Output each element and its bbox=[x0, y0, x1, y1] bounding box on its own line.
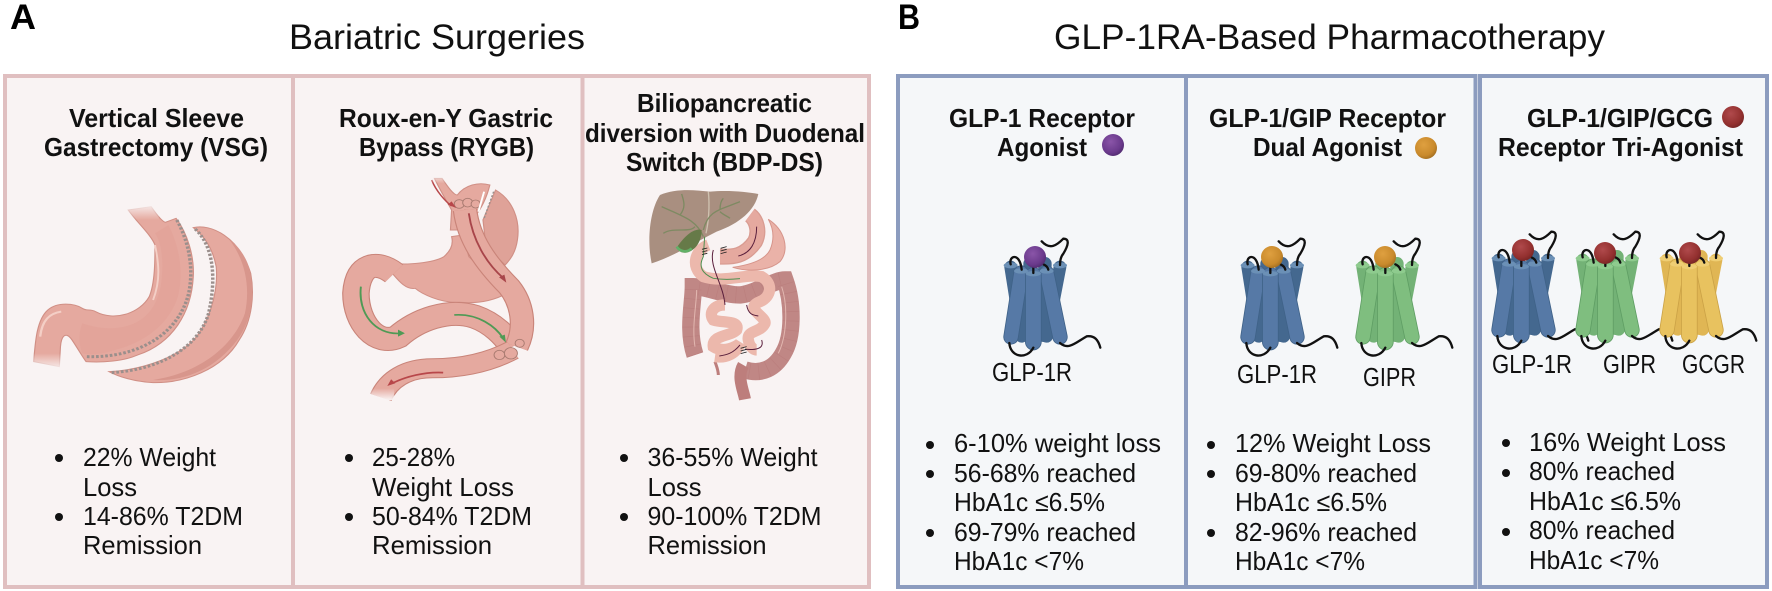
bullet list: dual agonist outcomes: HbA1c <7% bbox=[1235, 546, 1365, 576]
bullet list: VSG outcomes: 22% Weight bbox=[83, 442, 217, 472]
bullet list: BDP-DS outcomes: Loss bbox=[648, 472, 702, 502]
icon: GCGR receptor with red agonist: GCGR bbox=[1682, 349, 1745, 379]
bullet list: RYGB outcomes: Remission bbox=[372, 530, 492, 560]
bullet list: dual agonist outcomes: 69-80% reached bbox=[1235, 458, 1417, 488]
panel heading: BDP-DS: diversion with Duodenal bbox=[585, 118, 865, 148]
icon: GLP-1R receptor with red agonist bbox=[1492, 232, 1588, 379]
panel heading: tri-agonist: GLP-1/GIP/GCG bbox=[1527, 103, 1713, 133]
panel: biliopancreatic diversion with duodenal switch bbox=[582, 76, 869, 587]
icon: GLP-1R receptor with purple agonist bbox=[992, 239, 1100, 387]
icon: GIPR receptor with red agonist: GIPR bbox=[1603, 349, 1656, 379]
bullet list: RYGB outcomes: Weight Loss bbox=[372, 472, 514, 502]
icon: sleeve gastrectomy stomach bbox=[29, 203, 252, 383]
bullet list: dual agonist outcomes: 12% Weight Loss bbox=[1235, 428, 1431, 458]
panel heading: BDP-DS bbox=[585, 88, 865, 177]
panel heading: RYGB bbox=[339, 103, 553, 162]
panel heading: dual agonist: GLP-1/GIP Receptor bbox=[1209, 103, 1446, 133]
panel heading: GLP-1 receptor agonist: GLP-1 Receptor bbox=[949, 103, 1135, 133]
heading: Bariatric Surgeries: Bariatric Surgeries bbox=[289, 18, 585, 57]
bullet list: RYGB outcomes bbox=[345, 442, 532, 560]
panel: GLP-1 receptor agonist bbox=[898, 76, 1186, 587]
icon: GIPR receptor with red agonist bbox=[1576, 232, 1672, 379]
bullet list: VSG outcomes: 14-86% T2DM bbox=[83, 501, 243, 531]
bullet list: VSG outcomes: Loss bbox=[83, 472, 137, 502]
bullet list: GLP-1 agonist outcomes: 69-79% reached bbox=[954, 517, 1136, 547]
bullet list: BDP-DS outcomes: 36-55% Weight bbox=[648, 442, 818, 472]
panel heading: VSG: Gastrectomy (VSG) bbox=[44, 132, 268, 162]
panel heading: GLP-1 receptor agonist bbox=[949, 103, 1135, 162]
icon: GLP-1R receptor with orange agonist bbox=[1237, 239, 1337, 389]
icon: gastric bypass anatomy bbox=[356, 173, 524, 400]
bullet list: GLP-1 agonist outcomes: HbA1c <7% bbox=[954, 546, 1084, 576]
bullet list: tri-agonist outcomes: 16% Weight Loss bbox=[1529, 427, 1726, 457]
panel heading: BDP-DS: Switch (BDP-DS) bbox=[626, 147, 823, 177]
panel heading: dual agonist bbox=[1209, 103, 1446, 162]
panel heading: GLP-1 receptor agonist: Agonist bbox=[997, 132, 1087, 162]
icon: GCGR receptor with red agonist bbox=[1660, 232, 1756, 379]
panel heading: RYGB: Roux-en-Y Gastric bbox=[339, 103, 553, 133]
bullet list: GLP-1 agonist outcomes: 56-68% reached bbox=[954, 458, 1136, 488]
bullet list: BDP-DS outcomes: Remission bbox=[648, 530, 766, 560]
icon: GLP-1R receptor with purple agonist: GLP-1R bbox=[992, 357, 1072, 387]
icon: GIPR receptor with orange agonist bbox=[1356, 239, 1452, 392]
bullet list: tri-agonist outcomes: HbA1c <7% bbox=[1529, 545, 1659, 575]
panel: GLP-1/GIP/GCG receptor tri-agonist bbox=[1480, 76, 1767, 587]
panel: vertical sleeve gastrectomy bbox=[5, 76, 293, 587]
icon: GIPR receptor with orange agonist: GIPR bbox=[1363, 362, 1416, 392]
panel: GLP-1/GIP receptor dual agonist bbox=[1186, 76, 1476, 587]
bullet list: GLP-1 agonist outcomes: 6-10% weight loss bbox=[954, 428, 1161, 458]
panel heading: dual agonist: Dual Agonist bbox=[1253, 132, 1402, 162]
icon: GLP-1R receptor with red agonist: GLP-1R bbox=[1492, 349, 1572, 379]
panel heading: tri-agonist bbox=[1498, 103, 1744, 162]
bullet list: GLP-1 agonist outcomes: HbA1c ≤6.5% bbox=[954, 487, 1105, 517]
icon: GLP-1R receptor with orange agonist: GLP-1R bbox=[1237, 359, 1317, 389]
panel heading: RYGB: Bypass (RYGB) bbox=[359, 132, 534, 162]
bullet list: VSG outcomes bbox=[55, 442, 243, 560]
bullet list: tri-agonist outcomes bbox=[1502, 427, 1726, 575]
bullet list: VSG outcomes: Remission bbox=[83, 530, 202, 560]
bullet list: dual agonist outcomes bbox=[1207, 428, 1431, 576]
bullet list: tri-agonist outcomes: 80% reached bbox=[1529, 515, 1675, 545]
panel: Roux-en-Y gastric bypass bbox=[293, 76, 582, 587]
bullet list: tri-agonist outcomes: HbA1c ≤6.5% bbox=[1529, 486, 1681, 516]
bullet list: RYGB outcomes: 50-84% T2DM bbox=[372, 501, 532, 531]
panel heading: tri-agonist: Receptor Tri-Agonist bbox=[1498, 132, 1743, 162]
panel heading: VSG: Vertical Sleeve bbox=[69, 103, 244, 133]
bullet list: RYGB outcomes: 25-28% bbox=[372, 442, 455, 472]
bullet list: dual agonist outcomes: HbA1c ≤6.5% bbox=[1235, 487, 1387, 517]
panel heading: VSG bbox=[44, 103, 268, 162]
bullet list: BDP-DS outcomes bbox=[620, 442, 822, 560]
bullet list: tri-agonist outcomes: 80% reached bbox=[1529, 456, 1675, 486]
icon: liver and intestines bbox=[649, 190, 791, 399]
bullet list: dual agonist outcomes: 82-96% reached bbox=[1235, 517, 1417, 547]
bullet list: GLP-1 agonist outcomes bbox=[926, 428, 1161, 576]
bullet list: BDP-DS outcomes: 90-100% T2DM bbox=[648, 501, 822, 531]
heading: GLP-1RA-Based Pharmacotherapy: GLP-1RA-Based Pharmacotherapy bbox=[1054, 18, 1606, 57]
panel heading: BDP-DS: Biliopancreatic bbox=[637, 88, 812, 118]
